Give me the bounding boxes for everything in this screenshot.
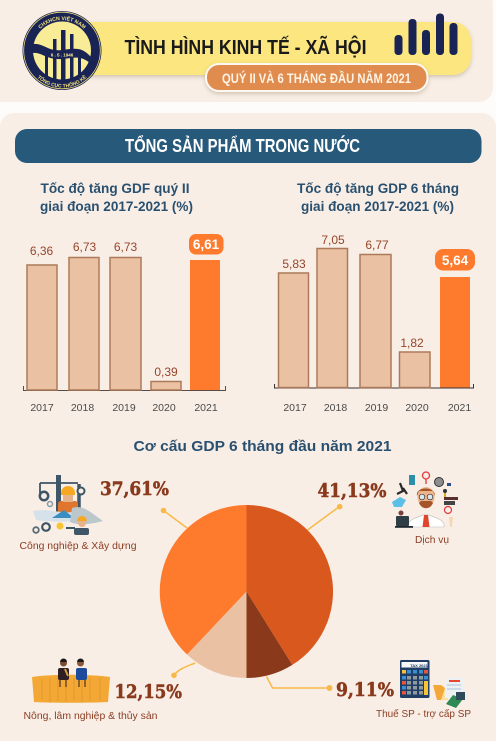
percentage: 41,13% <box>318 480 386 502</box>
value labels <box>282 233 424 350</box>
year labels: 2020 <box>405 402 429 414</box>
chart: six month growth <box>274 181 475 414</box>
year labels <box>30 402 218 414</box>
label: Nông, lâm nghiệp & thủy sản <box>24 710 158 722</box>
percentage: 9,11% <box>336 679 394 701</box>
banner: yellow title strip <box>70 22 471 75</box>
section heading bar <box>15 129 482 163</box>
highlight value 6,61: 6,61 <box>193 237 220 252</box>
label: Thuế SP - trợ cấp SP <box>376 708 471 720</box>
category: agriculture <box>24 659 182 722</box>
year labels: 2021 <box>448 402 471 414</box>
icon: bar chart <box>394 14 458 55</box>
percentage: 37,61% <box>100 478 169 500</box>
chart title: giai đoạn 2017-2021 (%) <box>40 199 193 214</box>
subtitle pill: QUÝ II VÀ 6 THÁNG ĐẦU NĂM 2021 <box>222 71 411 86</box>
axis <box>274 384 474 388</box>
chart: quarter II growth <box>24 181 226 414</box>
icon: statistics office logo: CHXHCN VIỆT NAM <box>38 16 86 29</box>
axis <box>24 386 226 390</box>
icon: service worker <box>392 472 458 528</box>
icon: statistics office logo: 6 . 5 . 1946 <box>51 52 74 58</box>
label: Công nghiệp & Xây dựng <box>20 540 137 552</box>
icon: statistics office logo: TỔNG CỤC THỐNG KÊ <box>38 75 87 88</box>
icon: farmers on wheat field <box>32 659 110 703</box>
value labels: 6,77 <box>365 238 389 252</box>
leader dots <box>161 504 343 691</box>
highlight value 5,64: 5,64 <box>442 253 469 268</box>
year labels: 2019 <box>112 402 136 414</box>
icon: statistics office logo <box>22 11 102 90</box>
category: taxes and subsidies <box>336 660 471 720</box>
chart title <box>40 181 193 214</box>
icon: construction workers <box>33 475 103 535</box>
year labels: 2017 <box>30 402 54 414</box>
year labels: 2018 <box>71 402 94 414</box>
year labels: 2017 <box>283 402 307 414</box>
value labels: 7,05 <box>321 233 345 247</box>
chart title: Tốc độ tăng GDP 6 tháng <box>297 181 459 196</box>
chart title: Tốc độ tăng GDF quý II <box>40 181 190 196</box>
category: industry and construction <box>20 475 169 552</box>
bars <box>27 258 220 390</box>
year labels <box>283 402 471 414</box>
leader lines <box>164 506 340 688</box>
percentage: 12,15% <box>114 681 182 703</box>
pie chart heading: Cơ cấu GDP 6 tháng đầu năm 2021 <box>134 438 392 455</box>
pie chart: GDP structure <box>160 505 333 678</box>
year labels: 2019 <box>365 402 388 414</box>
chart title <box>297 181 459 214</box>
highlight value 6,61 <box>189 234 224 254</box>
value labels: 1,82 <box>400 336 424 350</box>
category: services <box>318 472 458 546</box>
section heading bar: TỔNG SẢN PHẨM TRONG NƯỚC <box>125 135 360 156</box>
title: TÌNH HÌNH KINH TẾ - XÃ HỘI <box>124 35 366 59</box>
label: Dịch vụ <box>415 534 449 546</box>
subtitle pill <box>206 64 428 91</box>
chart title: giai đoạn 2017-2021 (%) <box>301 199 454 214</box>
value labels: 6,73 <box>73 240 97 254</box>
year labels: 2021 <box>194 402 218 414</box>
bars <box>278 248 470 388</box>
value labels: 5,83 <box>282 257 306 271</box>
panel: header <box>0 0 493 102</box>
highlight value 5,64 <box>435 249 475 270</box>
icon: tax calculator: TAX 2021 <box>410 663 429 668</box>
value labels: 6,73 <box>114 240 138 254</box>
value labels <box>30 240 178 379</box>
value labels: 0,39 <box>154 365 178 379</box>
year labels: 2020 <box>152 402 176 414</box>
year labels: 2018 <box>324 402 347 414</box>
value labels: 6,36 <box>30 244 54 258</box>
